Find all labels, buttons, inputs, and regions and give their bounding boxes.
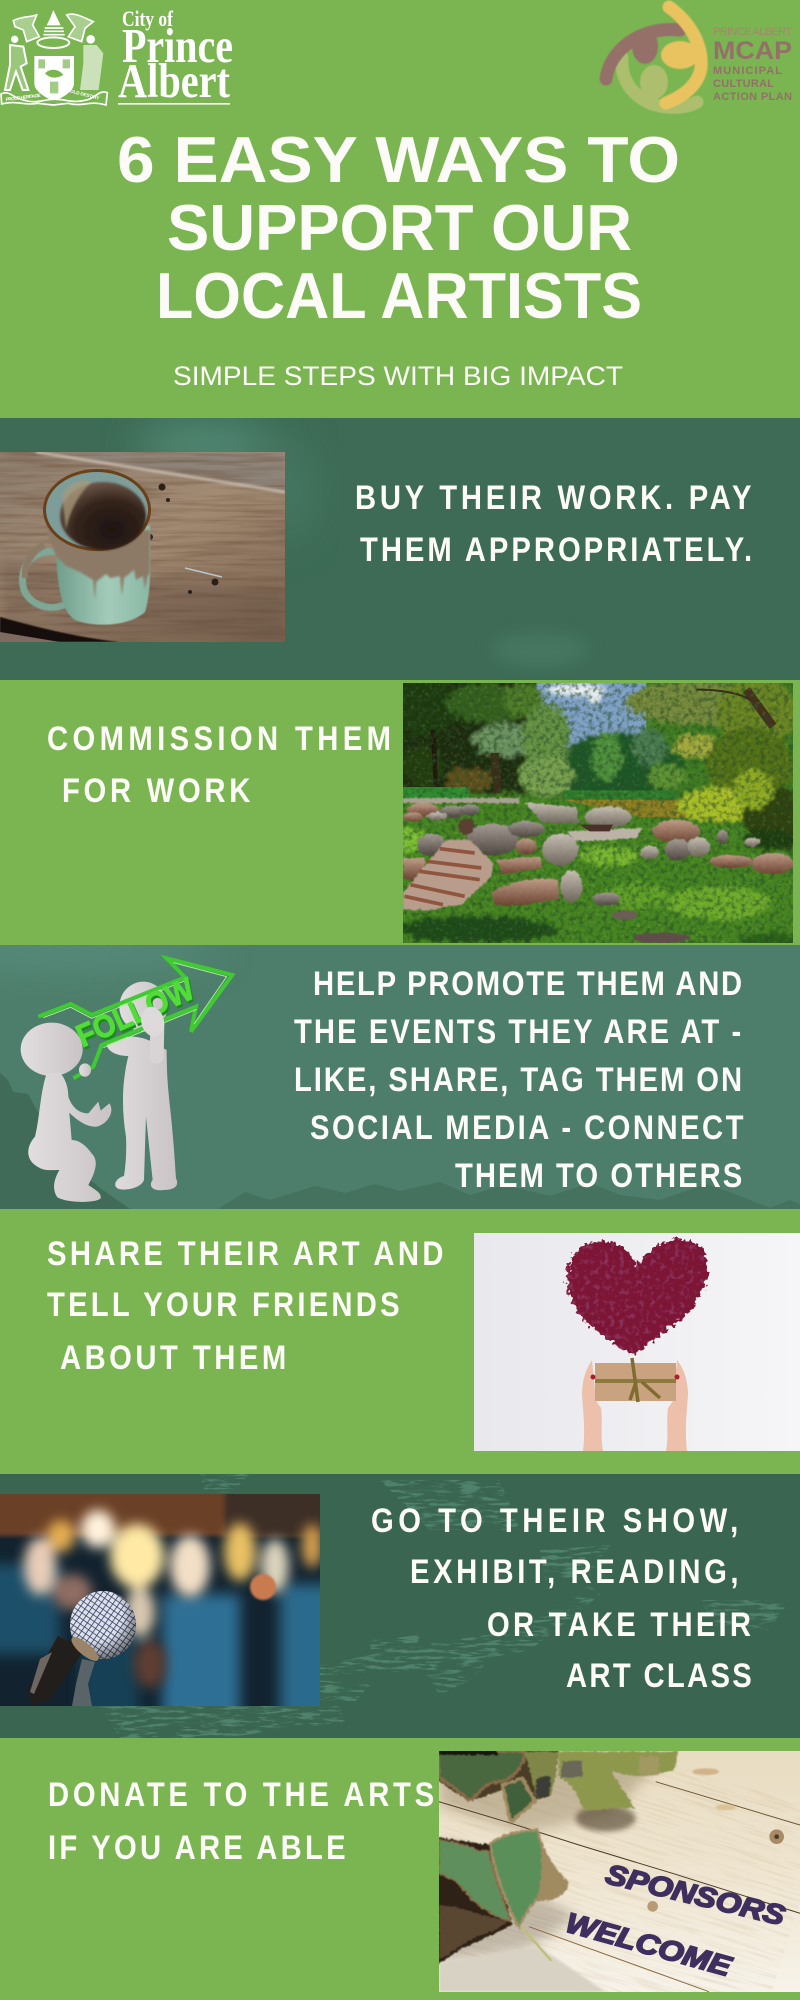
panel: commission them bbox=[0, 670, 800, 946]
image: sponsors welcome sign with leaves bbox=[439, 1751, 800, 1992]
logo wordmark: City of bbox=[122, 6, 174, 31]
text: help promote them: THE EVENTS THEY ARE AT - bbox=[294, 1012, 741, 1051]
logo: Prince Albert MCAP bbox=[606, 7, 792, 107]
title: SUPPORT OUR bbox=[167, 191, 632, 264]
icon: coat of arms: BOLD DESTINY bbox=[66, 88, 101, 101]
logo text: MCAP bbox=[713, 37, 792, 65]
image: heart and gift bbox=[474, 1233, 800, 1451]
text: help promote them: LIKE, SHARE, TAG THEM ON bbox=[294, 1060, 742, 1099]
panel: help promote them bbox=[0, 928, 800, 1209]
text: commission them: COMMISSION THEM bbox=[47, 719, 391, 758]
text: share their art bbox=[47, 1234, 443, 1377]
title: 6 EASY WAYS TO bbox=[117, 123, 680, 196]
text: buy their work bbox=[355, 478, 752, 569]
image: pottery mug on wood bbox=[0, 452, 285, 642]
icon: follow arrow: FOLLOW bbox=[72, 973, 201, 1056]
logo text: ACTION PLAN bbox=[713, 91, 792, 103]
panel: donate to the arts bbox=[0, 1707, 800, 2000]
panel: go to their show bbox=[0, 1474, 800, 1738]
illustration: two figures holding follow arrow bbox=[21, 958, 232, 1202]
logo wordmark: Prince bbox=[122, 18, 233, 73]
figure: crouching bbox=[21, 1023, 111, 1202]
icon: coat of arms: PROUD HERITAGE bbox=[6, 93, 41, 102]
text: help promote them bbox=[294, 964, 744, 1195]
logo wordmark: Albert bbox=[118, 53, 231, 108]
panel: buy their work bbox=[0, 418, 800, 680]
title: LOCAL ARTISTS bbox=[156, 259, 642, 332]
text: donate to the arts bbox=[48, 1775, 434, 1867]
logo text bbox=[713, 26, 792, 103]
logo text: PRINCE ALBERT bbox=[713, 26, 792, 38]
text: help promote them: SOCIAL MEDIA - CONNECT bbox=[310, 1108, 744, 1147]
icon: three figures circle bbox=[606, 7, 701, 107]
text: donate to the arts: IF YOU ARE ABLE bbox=[48, 1828, 346, 1867]
text: buy their work: THEM APPROPRIATELY. bbox=[360, 530, 752, 569]
text: share their art: SHARE THEIR ART AND bbox=[47, 1234, 443, 1273]
image: microphone with stage lights bbox=[0, 1494, 320, 1706]
stamped text: sponsors welcome bbox=[562, 1858, 788, 1983]
text: help promote them: THEM TO OTHERS bbox=[455, 1156, 742, 1195]
logo text: MUNICIPAL bbox=[713, 65, 782, 77]
logo: City of Prince Albert bbox=[1, 6, 233, 108]
text: go to their show bbox=[371, 1501, 752, 1695]
stamped text: sponsors welcome: WELCOME bbox=[562, 1907, 736, 1983]
icon: follow arrow bbox=[38, 958, 232, 1078]
text: go to their show: GO TO THEIR SHOW, bbox=[371, 1501, 738, 1540]
text: go to their show: ART CLASS bbox=[566, 1656, 752, 1695]
logo text: CULTURAL bbox=[713, 78, 774, 90]
text: donate to the arts: DONATE TO THE ARTS bbox=[48, 1775, 434, 1814]
image: park with rocks and trees bbox=[403, 683, 793, 943]
text: commission them bbox=[47, 719, 391, 810]
panel: share their art bbox=[0, 1209, 800, 1474]
figure: standing bbox=[107, 982, 177, 1190]
logo wordmark bbox=[118, 6, 233, 108]
text: help promote them: HELP PROMOTE THEM AND bbox=[313, 964, 742, 1003]
text: buy their work: BUY THEIR WORK. PAY bbox=[355, 478, 751, 517]
text: share their art: TELL YOUR FRIENDS bbox=[47, 1285, 400, 1324]
text: go to their show: OR TAKE THEIR bbox=[487, 1605, 751, 1644]
text: commission them: FOR WORK bbox=[62, 771, 250, 810]
stamped text: sponsors welcome: SPONSORS bbox=[603, 1858, 788, 1931]
icon: follow arrow: FOLLOW bbox=[71, 970, 199, 1054]
subtitle: SIMPLE STEPS WITH BIG IMPACT bbox=[173, 361, 623, 391]
text: go to their show: EXHIBIT, READING, bbox=[410, 1552, 739, 1591]
text: share their art: ABOUT THEM bbox=[60, 1338, 286, 1377]
figure: hand on arrow bbox=[138, 1004, 167, 1039]
title bbox=[117, 123, 680, 332]
icon: coat of arms bbox=[1, 10, 107, 105]
